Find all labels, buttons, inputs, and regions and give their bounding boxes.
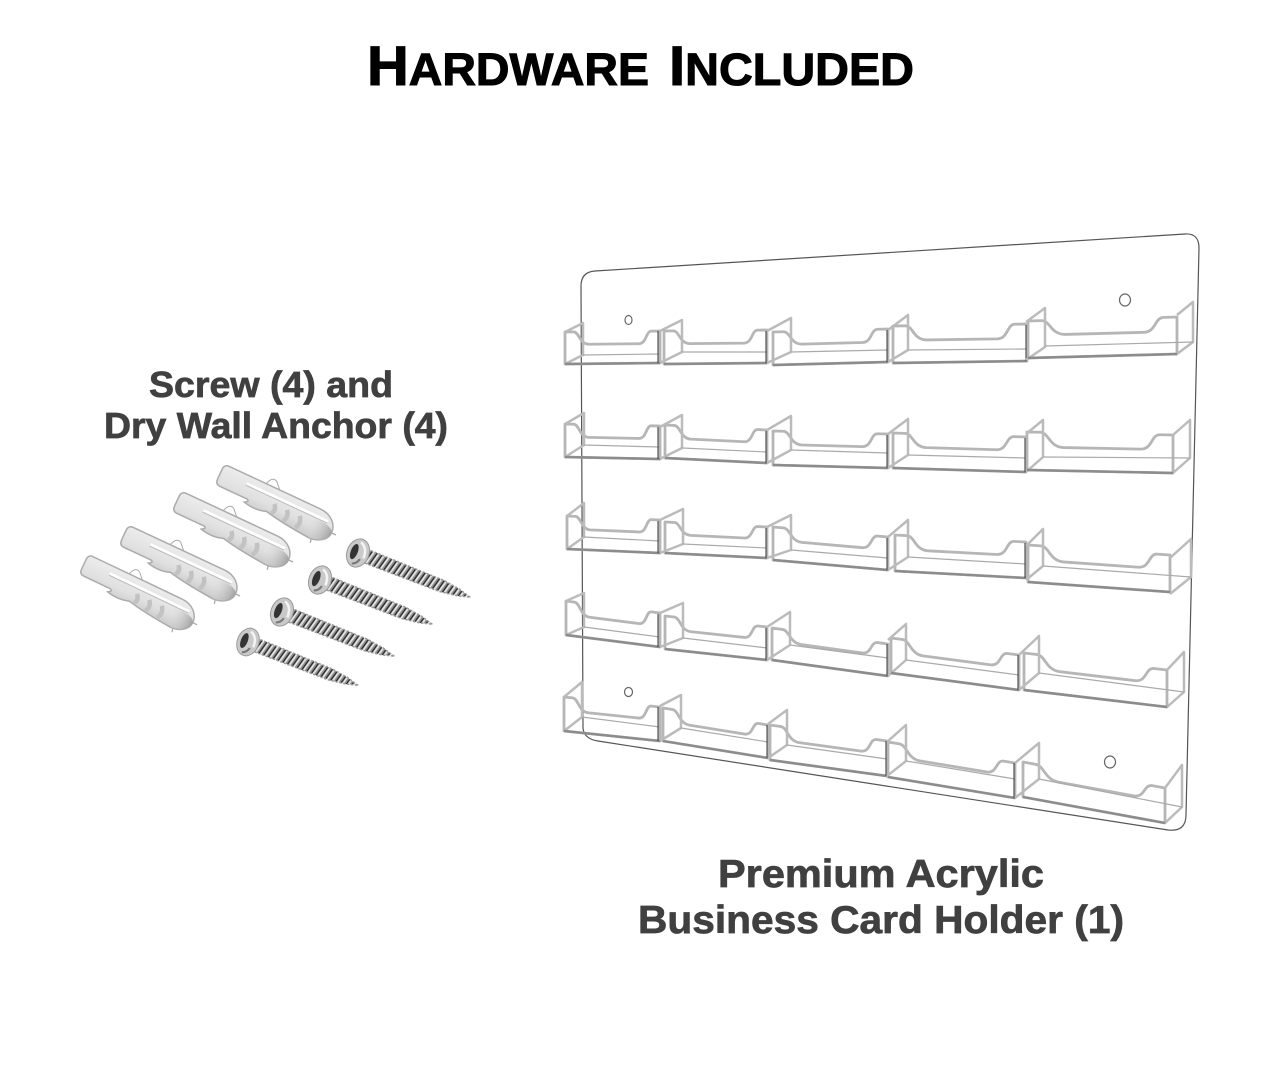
label: screws and anchors: Dry Wall Anchor (4) bbox=[104, 405, 448, 446]
label: business card holder: Premium Acrylic bbox=[718, 853, 1044, 896]
pocket row 5 bbox=[564, 682, 1182, 823]
hardware: screws bbox=[233, 535, 476, 699]
backing board outline bbox=[581, 234, 1199, 830]
hardware: wall anchors bbox=[74, 458, 346, 641]
label: business card holder: Business Card Holder (1) bbox=[638, 899, 1124, 942]
title: HARDWARE bbox=[367, 34, 649, 97]
pocket row 2 bbox=[565, 413, 1190, 473]
title bbox=[367, 34, 914, 97]
label: business card holder bbox=[638, 853, 1124, 942]
title: INCLUDED bbox=[669, 34, 914, 97]
pocket row 4 bbox=[566, 593, 1184, 707]
label: screws and anchors bbox=[104, 364, 448, 446]
mounting holes bbox=[624, 294, 1130, 768]
pocket row 1 bbox=[565, 302, 1193, 365]
pocket row 3 bbox=[567, 503, 1191, 594]
acrylic business card holder bbox=[564, 234, 1199, 830]
label: screws and anchors: Screw (4) and bbox=[149, 364, 393, 405]
